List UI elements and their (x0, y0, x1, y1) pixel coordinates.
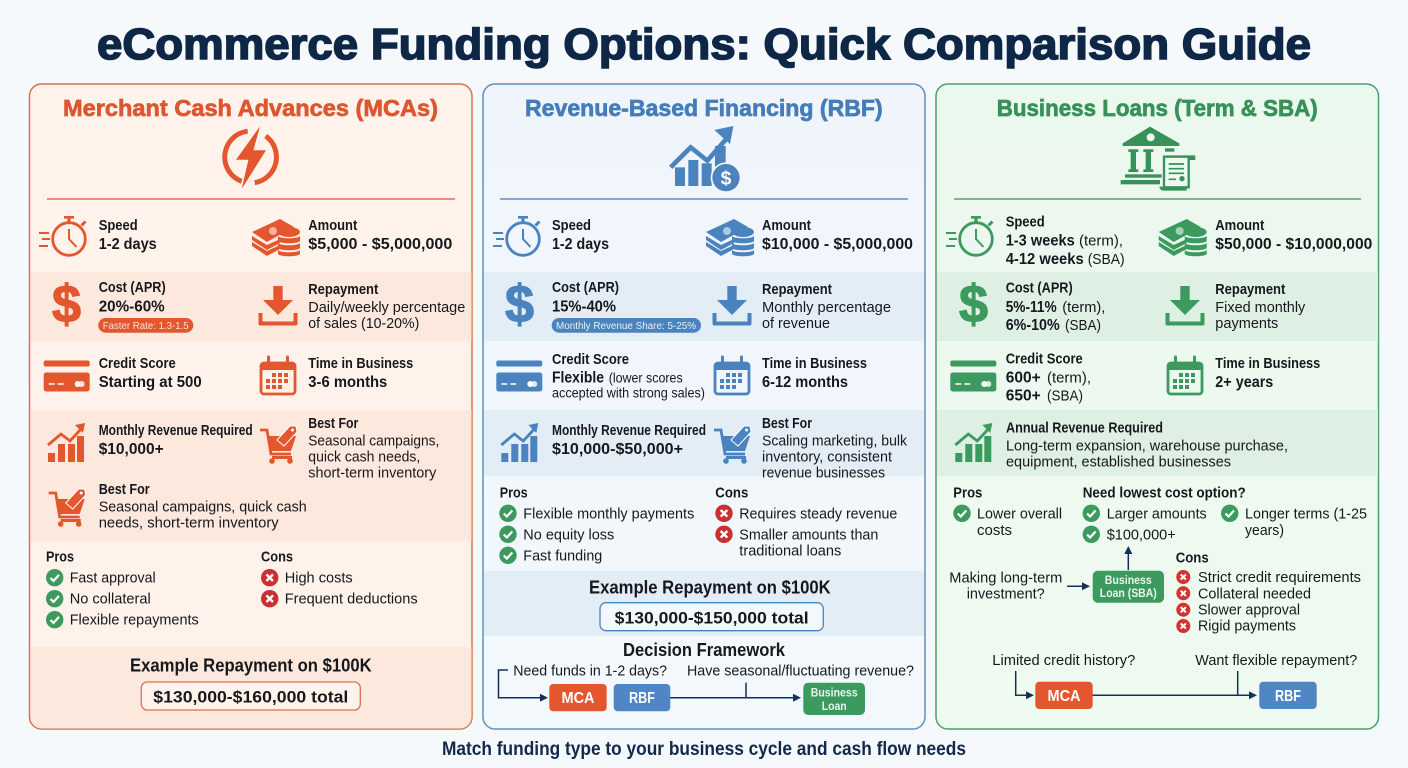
cons list: Smaller amounts than (739, 526, 878, 543)
pros list: Lower overall (977, 505, 1062, 522)
cons list: Requires steady revenue (739, 505, 897, 522)
pros list (953, 485, 1367, 543)
cons list: High costs (285, 570, 353, 587)
decision framework: Need funds in 1-2 days? (513, 662, 667, 679)
decision framework: Business (811, 686, 858, 700)
metric: monthly revenue (48, 422, 253, 462)
panel heading: Revenue-Based Financing (RBF) (525, 95, 883, 121)
best for text: revenue businesses (762, 465, 885, 482)
credit score text (1006, 350, 1091, 405)
decision question: lowest cost: Need lowest cost option? (1083, 485, 1246, 502)
amount text (308, 217, 452, 253)
monthly revenue text (552, 422, 706, 458)
cost text: 15%-40% (552, 298, 616, 316)
example repayment: $130,000-$160,000 total (153, 687, 348, 706)
metric: repayment (1168, 281, 1306, 332)
credit score text (552, 351, 705, 401)
metric: best for left (49, 481, 307, 532)
decision flow: long-term investment: Business (1105, 573, 1152, 587)
decision flow: long-term investment: Loan (SBA) (1100, 586, 1157, 600)
panel: merchant cash advances (30, 84, 472, 729)
best for text: quick cash needs, (308, 449, 420, 466)
speed text: (term), (1079, 233, 1123, 250)
panel heading: Business Loans (Term & SBA) (997, 95, 1318, 121)
pros list: Flexible monthly payments (523, 505, 694, 522)
cost text: Cost (APR) (1006, 279, 1073, 296)
repayment text: Repayment (1215, 281, 1285, 298)
icon: lightning bolt (225, 126, 276, 189)
panel background (30, 84, 472, 729)
decision flow: credit history and flexibility (992, 652, 1357, 709)
cost text (1006, 279, 1105, 334)
speed text (99, 217, 157, 253)
monthly revenue text: Monthly Revenue Required (99, 422, 253, 439)
footer tagline: Match funding type to your business cycle and cash flow needs (442, 739, 966, 760)
cost text: 20%-60% (99, 298, 165, 316)
amount text: Amount (308, 217, 357, 234)
credit score text: (SBA) (1047, 388, 1083, 405)
icon: credit card (496, 360, 542, 392)
best for text: Seasonal campaigns, (308, 433, 439, 450)
monthly revenue text: $10,000-$50,000+ (552, 441, 683, 458)
best for text: Scaling marketing, bulk (762, 433, 907, 450)
icon: growth chart (955, 423, 992, 462)
time in business text: 2+ years (1215, 374, 1273, 391)
credit score text: 600+ (1006, 370, 1041, 387)
best for text: Best For (308, 415, 358, 432)
decision framework: MCA (562, 690, 594, 707)
credit score text: accepted with strong sales) (552, 385, 705, 401)
best for text (308, 415, 439, 482)
amount text: $50,000 - $10,000,000 (1215, 236, 1372, 253)
metric: credit score (496, 351, 705, 401)
example repayment: Example Repayment on $100K (130, 656, 372, 676)
speed text: 1-2 days (99, 236, 157, 253)
decision flow: long-term investment: Making long-term (949, 570, 1062, 587)
band: cost and repayment (484, 272, 924, 341)
cons list (261, 549, 418, 608)
cost text: (term), (1062, 299, 1105, 316)
decision flow: long-term investment (949, 548, 1164, 603)
metric: time in business (715, 355, 867, 394)
time in business text (308, 355, 413, 391)
icon: credit card (950, 360, 996, 392)
cons list (1176, 550, 1361, 635)
metric: credit score (950, 350, 1091, 405)
credit score text: Flexible (552, 370, 604, 387)
repayment text: of sales (10-20%) (308, 315, 419, 332)
pros list: No equity loss (523, 526, 614, 543)
panel heading: Merchant Cash Advances (MCAs) (63, 95, 438, 121)
icon: download arrow (260, 286, 296, 324)
cons list: Cons (715, 485, 748, 502)
panel: revenue-based financing (483, 84, 925, 729)
decision flow: credit history and flexibility: RBF (1275, 688, 1301, 705)
time in business text: 6-12 months (762, 374, 848, 391)
cons list: Frequent deductions (285, 591, 418, 608)
cost text: Cost (APR) (552, 279, 619, 296)
decision framework: Have seasonal/fluctuating revenue? (687, 662, 914, 679)
time in business text: Time in Business (762, 355, 867, 372)
metric: speed (946, 214, 1125, 268)
monthly revenue text: $10,000+ (99, 441, 164, 458)
metric: best for (714, 415, 907, 482)
decision framework (498, 640, 914, 715)
pros list: $100,000+ (1107, 526, 1176, 543)
metric: amount (1159, 217, 1372, 256)
cost text: (SBA) (1065, 317, 1101, 334)
pros list: years) (1245, 522, 1284, 539)
icon: credit card (44, 360, 90, 392)
credit score text: Credit Score (552, 351, 629, 368)
metric: cost (505, 275, 701, 334)
best for text: needs, short-term inventory (99, 515, 279, 532)
metric: time in business (261, 355, 413, 394)
credit score text: (lower scores (609, 370, 683, 386)
pros list: Longer terms (1-25 (1245, 505, 1367, 522)
repayment text (762, 281, 891, 332)
metric: cost (959, 275, 1105, 334)
band: cost and repayment (937, 272, 1378, 341)
icon: stopwatch (493, 216, 540, 255)
speed text (552, 217, 609, 253)
credit score text: Starting at 500 (99, 374, 202, 391)
amount text: $5,000 - $5,000,000 (308, 236, 452, 253)
credit score text: 650+ (1006, 388, 1041, 405)
icon: cash and coins (706, 219, 754, 256)
annual revenue text: Long-term expansion, warehouse purchase, (1006, 438, 1288, 455)
best for text: Seasonal campaigns, quick cash (99, 499, 307, 516)
decision framework: Loan (822, 699, 847, 713)
best for text: Best For (99, 481, 150, 498)
time in business text: 3-6 months (308, 374, 387, 391)
icon: bank with document (1121, 127, 1195, 191)
best for text: Best For (762, 415, 812, 432)
credit score text: Credit Score (99, 355, 176, 372)
best for text: short-term inventory (308, 465, 437, 482)
metric: amount (706, 217, 913, 256)
icon: cash and coins (1159, 219, 1207, 256)
icon: download arrow (1168, 286, 1202, 324)
band: revenue and best for (484, 410, 924, 476)
best for text (762, 415, 907, 482)
pros list: costs (977, 522, 1012, 539)
pros list: Pros (500, 485, 528, 502)
decision flow: credit history and flexibility: MCA (1048, 688, 1080, 705)
icon: dollar sign: $ (52, 275, 81, 334)
time in business text (762, 355, 867, 391)
cons list: Strict credit requirements (1198, 569, 1361, 586)
speed text: 4-12 weeks (1006, 251, 1084, 268)
decision framework: RBF (629, 690, 655, 707)
decision flow: credit history and flexibility: Limited credit history? (992, 652, 1135, 669)
band: revenue and best for (30, 410, 472, 541)
speed text: Speed (99, 217, 138, 234)
metric: cost (52, 275, 193, 334)
icon: rising chart with dollar coin: $ (721, 169, 732, 190)
amount text: Amount (762, 217, 811, 234)
cost text (99, 279, 166, 316)
cons list: Cons (1176, 550, 1209, 567)
metric: amount (252, 217, 452, 256)
metric: repayment (714, 281, 891, 332)
metric: annual revenue (955, 419, 1288, 471)
icon: cash and coins (252, 219, 300, 256)
example repayment: $130,000-$150,000 total (615, 608, 809, 627)
repayment text: Fixed monthly (1215, 299, 1306, 316)
example repayment: Example Repayment on $100K (589, 577, 831, 597)
pros list: Pros (46, 549, 74, 566)
monthly revenue text (99, 422, 253, 458)
icon: stopwatch (39, 216, 86, 255)
repayment text: of revenue (762, 315, 830, 332)
pros list: Larger amounts (1107, 505, 1207, 522)
time in business text (1215, 355, 1320, 391)
annual revenue text: Annual Revenue Required (1006, 419, 1163, 436)
header divider (47, 198, 455, 200)
icon: growth chart (48, 423, 85, 462)
cons list: Cons (261, 549, 293, 566)
speed text: Speed (552, 217, 591, 234)
repayment text: Repayment (308, 281, 378, 298)
speed text: 1-3 weeks (1006, 233, 1075, 250)
metric: best for right (260, 415, 439, 482)
decision flow: credit history and flexibility: Want flexible repayment? (1195, 652, 1357, 669)
icon: rising chart with dollar coin (671, 126, 741, 193)
header divider (954, 198, 1361, 200)
panel: business loans (936, 84, 1378, 729)
header divider (500, 198, 908, 200)
icon: cart (260, 426, 297, 464)
pill: monthly revenue share: Monthly Revenue Share: 5-25% (556, 320, 696, 332)
cons list (715, 485, 897, 559)
amount text: $10,000 - $5,000,000 (762, 236, 913, 253)
pros list (499, 485, 694, 564)
speed text: Speed (1006, 214, 1045, 231)
metric: time in business (1168, 355, 1320, 394)
band: cost and repayment (30, 272, 472, 341)
decision framework: Decision Framework (623, 640, 786, 660)
decision flow: long-term investment: investment? (967, 586, 1045, 603)
pill: factor rate: Faster Rate: 1.3-1.5 (103, 320, 189, 332)
icon: cart (714, 426, 751, 464)
amount text (1215, 217, 1372, 253)
speed text: (SBA) (1088, 251, 1125, 268)
repayment text (308, 281, 465, 332)
best for text: inventory, consistent (762, 449, 893, 466)
cons list: Rigid payments (1198, 618, 1296, 635)
pros list: No collateral (70, 591, 151, 608)
pros list: Flexible repayments (70, 612, 199, 629)
metric: monthly revenue (501, 422, 706, 462)
repayment text: Daily/weekly percentage (308, 299, 465, 316)
cost text: 6%-10% (1006, 317, 1060, 334)
annual revenue text (1006, 419, 1288, 471)
credit score text: (term), (1047, 370, 1091, 387)
title: eCommerce Funding Options: Quick Comparison Guide (97, 20, 1311, 69)
icon: cart with tag (49, 489, 86, 527)
cons list: Slower approval (1198, 602, 1300, 619)
cost text: Cost (APR) (99, 279, 166, 296)
example repayment (30, 647, 472, 728)
icon: growth chart (501, 423, 538, 462)
time in business text: Time in Business (1215, 355, 1320, 372)
cons list: traditional loans (739, 542, 841, 559)
monthly revenue text: Monthly Revenue Required (552, 422, 706, 439)
amount text: Amount (1215, 217, 1264, 234)
icon: download arrow (714, 286, 750, 324)
metric: speed (493, 216, 609, 255)
annual revenue text: equipment, established businesses (1006, 454, 1231, 471)
metric: repayment (260, 281, 465, 332)
repayment text: payments (1215, 315, 1278, 332)
band: annual revenue (937, 410, 1378, 476)
cons list: Collateral needed (1198, 585, 1311, 602)
icon: dollar sign: $ (959, 275, 988, 334)
example repayment (484, 571, 924, 636)
pros list: Fast funding (523, 547, 602, 564)
panel background (936, 84, 1378, 729)
pros list: Pros (953, 485, 982, 502)
pros list (46, 549, 199, 629)
metric: credit score (44, 355, 202, 392)
repayment text: Repayment (762, 281, 832, 298)
panel background (483, 84, 925, 729)
icon: dollar sign: $ (505, 275, 534, 334)
icon: calendar (261, 357, 295, 394)
credit score text: Credit Score (1006, 350, 1083, 367)
best for text (99, 481, 307, 532)
metric: speed (39, 216, 157, 255)
amount text (762, 217, 913, 253)
credit score text (99, 355, 202, 391)
cost text: 5%-11% (1006, 299, 1057, 316)
speed text (1006, 214, 1125, 268)
cost text (552, 279, 619, 316)
icon: calendar (1168, 357, 1202, 394)
time in business text: Time in Business (308, 355, 413, 372)
speed text: 1-2 days (552, 236, 609, 253)
repayment text (1215, 281, 1306, 332)
icon: calendar (715, 357, 749, 394)
pros list: Fast approval (70, 570, 156, 587)
repayment text: Monthly percentage (762, 299, 891, 316)
icon: stopwatch (946, 216, 992, 255)
